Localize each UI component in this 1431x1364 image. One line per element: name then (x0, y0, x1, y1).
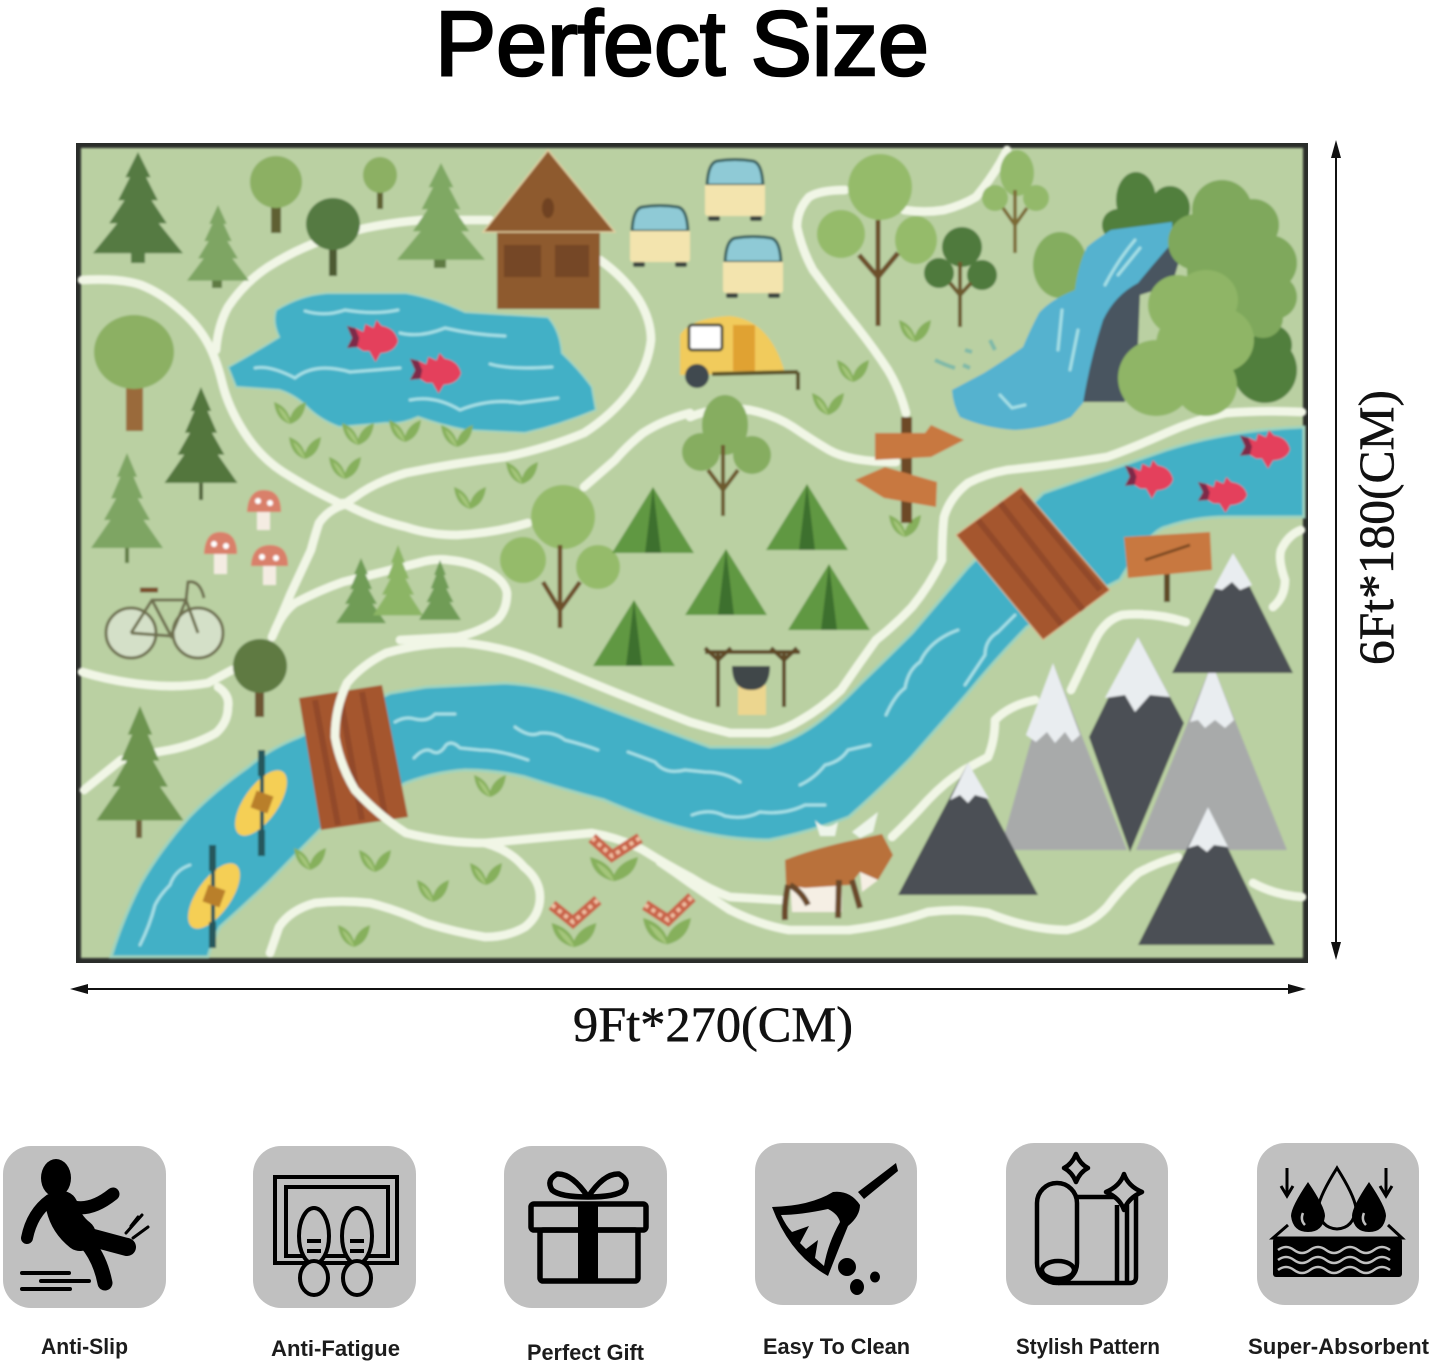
bridge: upper (956, 487, 1110, 640)
conifer: dark top left (93, 152, 183, 263)
width label: 9Ft*270(CM) (573, 996, 853, 1052)
bush: dark behind waterfall (1102, 172, 1190, 241)
river fish (1198, 477, 1247, 513)
tree: round top (250, 156, 302, 233)
tents (593, 484, 870, 666)
tree: slim top right (982, 150, 1049, 253)
moose (785, 812, 893, 920)
falling water (952, 222, 1172, 430)
icon: doormat with shoes (275, 1177, 397, 1295)
feature: perfect gift (504, 1146, 667, 1308)
tree: branched centre (500, 485, 620, 628)
pond fish (410, 353, 461, 393)
feature: anti-slip (3, 1146, 166, 1308)
tree: big round left (94, 315, 174, 431)
tree: small round top (363, 157, 397, 209)
caravan trailer (680, 316, 798, 390)
kayak 2 (178, 845, 250, 948)
conifers: small cluster (336, 545, 461, 623)
bush: dark lower right (1233, 325, 1297, 403)
mountain: grey right (1136, 663, 1287, 850)
river (111, 427, 1304, 957)
camp cooking pot (705, 648, 800, 715)
mountain: dark centre (1089, 637, 1184, 852)
icon: drops absorbed into mat (1273, 1168, 1402, 1277)
width dimension arrow (70, 984, 1306, 994)
label: Anti-Fatigue (271, 1336, 400, 1361)
cabin (483, 150, 615, 309)
tree: dark branched (924, 227, 997, 327)
tree: branched near camp (682, 395, 771, 516)
icon: broom and dust (772, 1163, 898, 1295)
icon: slipping person (22, 1159, 148, 1289)
water highlights (1000, 240, 1140, 408)
conifer: left (91, 453, 163, 563)
signpost (855, 417, 964, 523)
tile (755, 1143, 917, 1305)
height dimension arrow (1331, 140, 1341, 960)
bush: large mid green (1168, 180, 1297, 338)
feature: easy to clean (755, 1143, 917, 1305)
bridge: lower (299, 685, 408, 830)
conifer: near cabin (397, 163, 485, 268)
bush: front light (1118, 270, 1254, 416)
label: Anti-Slip (41, 1334, 128, 1359)
height label: 6Ft*180(CM) (1348, 390, 1404, 665)
camper van 2 (723, 236, 783, 298)
conifer: small top left (187, 205, 249, 288)
conifer: lower left (96, 706, 184, 838)
tile (1257, 1143, 1419, 1305)
mountain: dark lower centre (898, 763, 1038, 895)
paths (82, 150, 1302, 953)
label: Easy To Clean (763, 1334, 910, 1359)
flowers (552, 838, 692, 947)
tree: dark round near bridge (233, 639, 287, 717)
meadow plants (294, 320, 931, 947)
label: Super-Absorbent (1248, 1334, 1430, 1359)
mushrooms (204, 490, 288, 585)
bush: left of waterfall (1033, 232, 1087, 298)
mountain: grey left (1000, 663, 1127, 850)
label: Stylish Pattern (1016, 1334, 1160, 1359)
tree: branched top centre (817, 154, 937, 326)
feature: anti-fatigue (253, 1146, 416, 1308)
small puddles (935, 340, 995, 368)
mountain: dark lower right (1138, 807, 1275, 945)
river ripples (140, 615, 1015, 945)
feature: super-absorbent (1257, 1143, 1419, 1305)
kayak 1 (225, 750, 297, 856)
camper van 1 (705, 160, 765, 221)
pond ripples (255, 310, 558, 410)
tree: dark round (306, 198, 360, 276)
river fish (1125, 460, 1173, 499)
tile (1006, 1143, 1168, 1305)
conifer: dark left (164, 387, 238, 500)
tile (253, 1146, 416, 1308)
icon: rolled rug with sparkles (1037, 1154, 1142, 1283)
mountain: dark upper right (1172, 553, 1293, 673)
tile (504, 1146, 667, 1308)
feature: stylish pattern (1006, 1143, 1168, 1305)
wooden sign (1124, 532, 1212, 602)
bicycle (106, 582, 223, 658)
tile (3, 1146, 166, 1308)
river fish (1240, 430, 1290, 469)
rock face (1077, 243, 1180, 402)
pond fish (347, 320, 398, 362)
camper van 3 (630, 206, 690, 267)
pond plants (274, 402, 538, 509)
icon: gift box (531, 1174, 646, 1281)
rug map panel (76, 143, 1308, 963)
waterfall scene (935, 172, 1297, 430)
pond (228, 293, 596, 433)
